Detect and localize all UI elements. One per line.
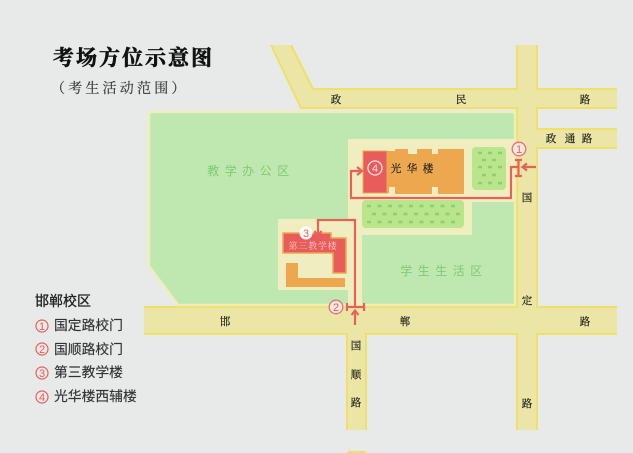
- legend item 1: 国定路校门: [54, 317, 123, 333]
- road labels: [220, 93, 593, 410]
- road labels: 路: [580, 315, 591, 328]
- road labels: 路: [351, 396, 362, 409]
- marker 2: [329, 300, 343, 314]
- road labels: 政: [331, 93, 342, 106]
- subtitle: （考生活动范围）: [51, 80, 189, 97]
- road labels: 通: [565, 133, 576, 145]
- legend item 1: 1: [39, 321, 45, 333]
- green bed: east: [472, 147, 506, 190]
- campus green area: [149, 112, 515, 305]
- road network: [144, 45, 617, 453]
- road labels: 路: [580, 93, 591, 106]
- gate 2 with entry arrow: [347, 303, 364, 325]
- legend item 4: 光华楼西辅楼: [54, 389, 137, 404]
- building: orange wing: [286, 263, 345, 287]
- road labels: 路: [522, 397, 533, 410]
- label: Guanghua: 华: [407, 162, 418, 175]
- label: Guanghua: 光: [391, 162, 402, 175]
- building: third teaching building: [283, 233, 346, 273]
- road labels: 国: [351, 340, 361, 352]
- label: Guanghua: 楼: [423, 162, 434, 175]
- green bed: south: [362, 200, 464, 228]
- label: Guanghua: [391, 162, 434, 175]
- building: Guanghua: [387, 149, 464, 194]
- title: 考场方位示意图: [53, 46, 214, 70]
- road labels: 邯: [220, 315, 231, 328]
- zone label: teaching and office: 教学办公区: [207, 163, 295, 178]
- marker 3: 3: [303, 228, 309, 240]
- road labels: 郸: [400, 315, 411, 328]
- zone label: student living: 学生生活区: [400, 263, 488, 278]
- legend heading: 邯郸校区: [35, 293, 91, 309]
- road labels: 路: [582, 132, 593, 145]
- legend item 4: 4: [39, 392, 45, 404]
- marker 4: [368, 161, 382, 175]
- marker 1: 1: [516, 144, 522, 156]
- road labels: 国: [522, 192, 532, 204]
- road labels: 定: [522, 295, 533, 307]
- paved zone around Guanghua building: [278, 139, 514, 304]
- route from gate 2 to third teaching building: [314, 220, 355, 307]
- legend: [35, 293, 137, 404]
- marker 2: 2: [333, 302, 339, 314]
- gate 1 with entry arrow: [515, 160, 536, 176]
- legend item 2: 2: [39, 344, 45, 356]
- label: third teaching building: 第三教学楼: [288, 240, 338, 251]
- marker 3: [300, 226, 312, 240]
- marker 4: 4: [372, 163, 378, 175]
- marker 1: [512, 142, 526, 156]
- road labels: 顺: [351, 368, 362, 381]
- legend item 2: 国顺路校门: [54, 341, 123, 357]
- legend item 3: 第三教学楼: [54, 364, 123, 380]
- route from gate 1 to annex: [351, 167, 518, 198]
- legend item 3: 3: [39, 368, 45, 380]
- road labels: 政: [546, 132, 557, 145]
- building: Guanghua west annex: [363, 151, 387, 193]
- road labels: 民: [456, 94, 466, 106]
